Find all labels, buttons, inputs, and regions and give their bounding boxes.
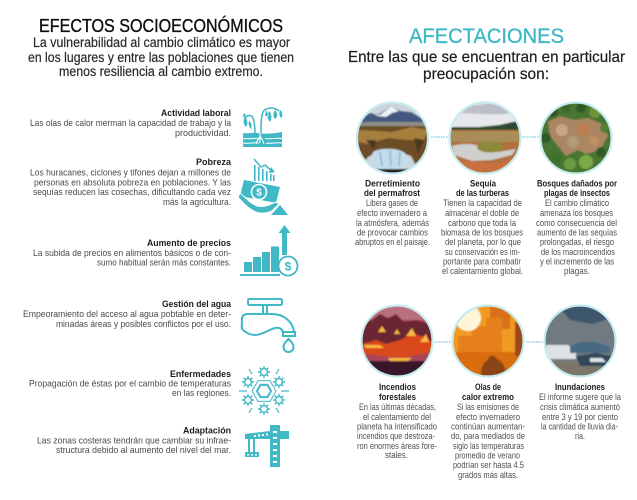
caption: bosques dañados: Bosques dañados por <box>537 178 617 188</box>
caption: derretimiento del permafrost <box>355 178 430 247</box>
caption: inundaciones <box>539 382 622 441</box>
item: gestión del agua: minadas áreas y posibles conflictos por el uso. <box>56 318 231 329</box>
caption: inundaciones: Inundaciones <box>555 382 605 392</box>
item: actividad laboral: productividad. <box>175 127 231 138</box>
photo: turberas <box>448 100 524 178</box>
intro text: menos resiliencia al cambio extremo. <box>59 64 263 79</box>
item: enfermedades: Propagación de éstas por el cambio de temperaturas <box>29 378 231 388</box>
caption: olas de calor extremo: Olas de <box>475 382 501 392</box>
caption: inundaciones: ria. <box>575 431 585 441</box>
caption: olas de calor extremo: grados más altas. <box>458 470 518 480</box>
icon: dinero y mano <box>238 159 288 215</box>
caption: olas de calor extremo: continúan aumentan- <box>451 422 525 432</box>
photo: bosque <box>539 100 615 176</box>
item: actividad laboral: Actividad laboral <box>161 107 231 118</box>
caption: derretimiento del permafrost: abruptos en el paisaje. <box>355 237 430 247</box>
item: pobreza: personas en absoluta pobreza en poblaciones. Y las <box>34 176 231 188</box>
caption: sequía de las turberas: Tienen la capacidad de <box>443 198 522 208</box>
caption: sequía de las turberas: del planeta, por lo que <box>445 237 521 247</box>
panel: efectos socioeconómicos <box>23 15 294 455</box>
item: adaptación: Adaptación <box>183 424 231 436</box>
caption: incendios forestales: ron enormes áreas fore- <box>357 441 437 451</box>
caption: sequía de las turberas: portante para combatir <box>443 256 521 266</box>
item: enfermedades <box>29 368 231 398</box>
icon: grúa <box>245 425 289 467</box>
item: pobreza: más la agricultura. <box>163 196 231 207</box>
caption: derretimiento del permafrost: del permafrost <box>364 188 420 198</box>
item: aumento de precios: sumo habitual serán más constantes. <box>97 256 231 268</box>
photo: calor extremo <box>450 304 526 380</box>
intro text: en los lugares y entre las poblaciones que tienen <box>28 50 294 65</box>
caption: inundaciones: crisis climática aumentó <box>540 402 620 412</box>
caption: inundaciones: la cantidad de lluvia dia- <box>541 422 618 432</box>
item: gestión del agua: Empeoramiento del acceso al agua pobtable en deter- <box>23 308 231 319</box>
caption: incendios forestales: Incendios <box>379 382 416 392</box>
caption: inundaciones: entre 3 y 19 por ciento <box>542 412 618 422</box>
item: gestión del agua <box>23 298 232 329</box>
caption: derretimiento del permafrost: efecto invernadero a <box>357 208 428 218</box>
caption: sequía de las turberas: biomasa de los bosques <box>441 228 523 238</box>
caption: bosques dañados: aumento de las sequías <box>537 228 617 238</box>
icon: aumento de precios: $ <box>285 260 292 274</box>
photo: permafrost <box>355 100 431 177</box>
caption: bosques dañados <box>536 178 617 276</box>
item: adaptación <box>37 424 231 455</box>
caption: bosques dañados: El cambio climático <box>545 198 609 208</box>
caption: sequía de las turberas: almacenar el doble de <box>445 208 519 218</box>
item: pobreza: sequías reducen las cosechas, dificultando cada vez <box>33 186 231 197</box>
subtitle: Entre las que se encuentran en particular <box>348 49 626 66</box>
caption: sequía de las turberas: carbono que toda la <box>448 218 517 228</box>
item: enfermedades: en las regiones. <box>172 387 231 398</box>
panel: afectaciones <box>348 25 626 83</box>
icon: planta marchita <box>243 108 282 147</box>
caption: bosques dañados: prolongadas, el riesgo <box>540 237 614 247</box>
photo: inundaciones <box>543 304 619 380</box>
caption: incendios forestales: el calentamiento del <box>363 412 431 422</box>
caption: olas de calor extremo: calor extremo <box>462 392 514 402</box>
caption: derretimiento del permafrost: la atmósfera, además <box>356 218 429 228</box>
caption: incendios forestales: forestales <box>379 392 416 402</box>
caption: sequía de las turberas: de las turberas <box>456 188 509 198</box>
subtitle <box>348 49 626 83</box>
item: gestión del agua: Gestión del agua <box>162 298 232 309</box>
photo: incendios <box>360 304 436 380</box>
caption: derretimiento del permafrost: de provocar cambios <box>357 228 428 238</box>
caption: incendios forestales: En las últimas décadas, <box>359 402 436 412</box>
caption: incendios forestales: incendios que destroza- <box>357 431 435 441</box>
caption: derretimiento del permafrost: Libera gases de <box>366 198 418 208</box>
item: aumento de precios: Aumento de precios <box>147 237 231 248</box>
caption: bosques dañados: amenaza los bosques <box>540 208 613 218</box>
caption: sequía de las turberas: su conservación es im- <box>445 247 520 257</box>
caption: sequía de las turberas: Sequía <box>470 178 497 188</box>
caption: olas de calor extremo: do, para mediados de <box>451 431 525 441</box>
subtitle: preocupación son: <box>423 66 549 83</box>
title: afectaciones: AFECTACIONES <box>409 25 564 48</box>
caption: inundaciones: El informe sugere que la <box>539 392 622 402</box>
caption: bosques dañados: plagas de insectos <box>544 188 610 198</box>
caption: bosques dañados: de los macroincendios <box>541 247 615 257</box>
caption: incendios forestales: stales. <box>385 450 408 460</box>
item: aumento de precios <box>33 237 231 268</box>
caption: incendios forestales: planeta ha intensificado <box>357 422 437 432</box>
caption: derretimiento del permafrost: Derretimiento <box>365 178 420 188</box>
icon: enfermedades <box>239 366 289 415</box>
caption: olas de calor extremo: siglo las temperaturas <box>453 441 524 451</box>
item: adaptación: Las zonas costeras tendrán que cambiar su infrae- <box>37 434 231 446</box>
caption: olas de calor extremo: efecto invernadero <box>456 412 520 422</box>
item: actividad laboral: Las olas de calor merman la capacidad de trabajo y la <box>30 117 232 128</box>
item: pobreza: Pobreza <box>196 156 232 167</box>
intro text <box>28 35 294 79</box>
icon: dinero y mano: $ <box>256 188 262 198</box>
caption: bosques dañados: como consecuencia del <box>536 218 617 228</box>
item: actividad laboral <box>30 107 232 138</box>
title: efectos socioeconómicos: EFECTOS SOCIOECONÓMICOS <box>39 15 283 36</box>
icon: grifo de agua <box>242 299 295 352</box>
caption: bosques dañados: plagas. <box>564 266 590 276</box>
item: pobreza <box>30 156 232 207</box>
intro text: La vulnerabilidad al cambio climático es mayor <box>33 35 290 50</box>
item: aumento de precios: La subida de precios en alimentos básicos o de con- <box>33 247 231 258</box>
caption: olas de calor extremo: podrían ser hasta 4.5 <box>453 460 524 470</box>
caption: incendios forestales <box>357 382 437 460</box>
icon: aumento de precios <box>240 225 298 276</box>
caption: olas de calor extremo <box>451 382 525 480</box>
item: pobreza: Los huracanes, ciclones y tifones dejan a millones de <box>30 166 231 178</box>
caption: olas de calor extremo: Si las emisiones de <box>457 402 519 412</box>
caption: sequía de las turberas <box>441 178 523 276</box>
connectors <box>431 137 543 342</box>
caption: bosques dañados: y el incremento de las <box>540 256 614 266</box>
caption: olas de calor extremo: promedio de verano <box>455 450 520 460</box>
caption: sequía de las turberas: el calentamiento global. <box>442 266 523 276</box>
item: enfermedades: Enfermedades <box>170 368 231 379</box>
item: adaptación: structura debido al aumento del nivel del mar. <box>56 444 231 455</box>
